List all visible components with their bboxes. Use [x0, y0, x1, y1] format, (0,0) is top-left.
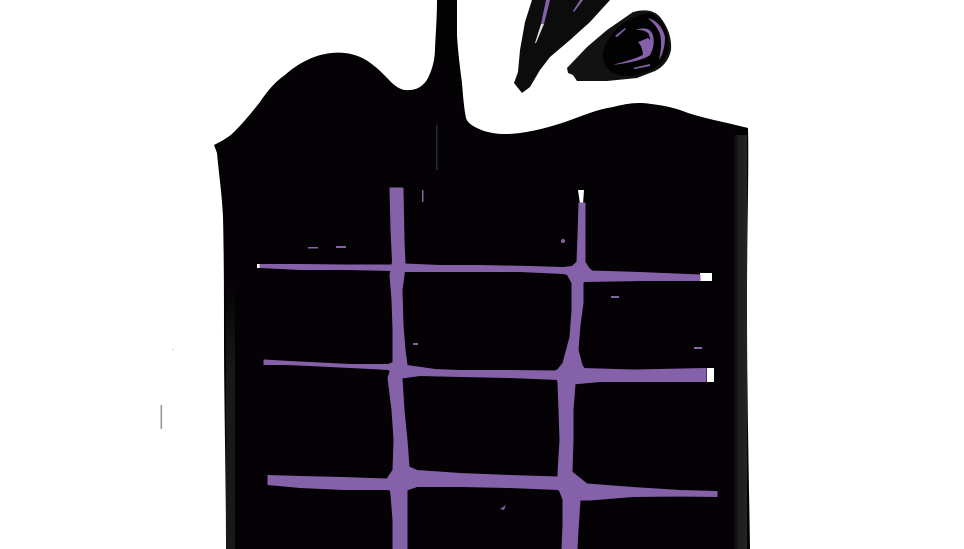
- vertical line one: [388, 188, 409, 549]
- purple grid on the chocolate bar: [260, 188, 717, 549]
- droplet highlights: [613, 18, 665, 69]
- white tips of the grid lines: [257, 190, 714, 382]
- horizontal line one: [260, 264, 700, 282]
- small droplet: [567, 10, 671, 81]
- grey ink texture on bar edges: [226, 125, 747, 549]
- vertical line two: [556, 203, 590, 549]
- chocolate bar body with stem: [214, 0, 750, 549]
- horizontal line three: [268, 467, 717, 500]
- small purple flecks: [308, 190, 702, 510]
- large droplet: [514, 0, 610, 93]
- stray marks on background: [160, 348, 174, 429]
- droplet highlights: [541, 0, 583, 24]
- horizontal line two: [264, 360, 706, 384]
